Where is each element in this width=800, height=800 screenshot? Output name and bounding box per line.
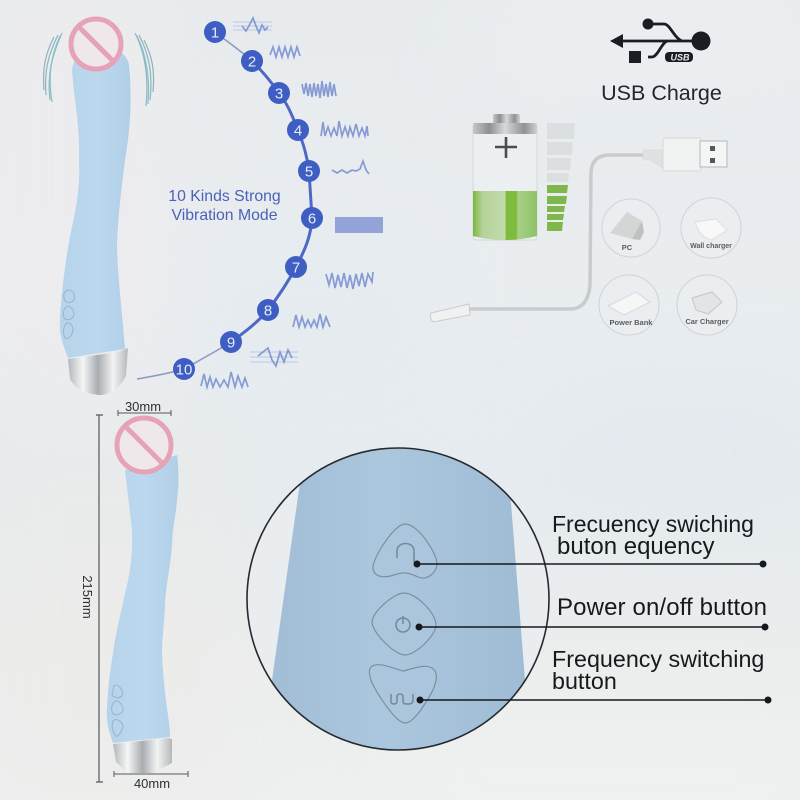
mode numbers: 6	[308, 210, 316, 228]
label: frecuency swiching	[552, 511, 754, 560]
mode nodes	[173, 21, 323, 380]
mode numbers: 9	[227, 334, 235, 352]
mode numbers: 7	[292, 260, 300, 276]
button: frequency up	[373, 524, 437, 578]
vibration marks left	[43, 33, 62, 102]
mode numbers: 10	[176, 362, 192, 378]
vibration mode label: Vibration Mode	[172, 207, 278, 224]
charger option: wall charger	[681, 198, 741, 258]
label: frequency switching: button	[552, 668, 617, 694]
mode numbers: 1	[211, 24, 219, 42]
vibration mode label: 10 Kinds Strong	[168, 188, 281, 205]
charger option: PC	[602, 199, 660, 257]
mode numbers: 4	[294, 122, 302, 140]
mode numbers: 2	[248, 54, 256, 70]
vibration mode label	[168, 188, 281, 224]
charger option: car charger	[677, 275, 737, 335]
waveforms	[201, 18, 383, 387]
battery level bars	[547, 123, 575, 231]
prohibition sign	[71, 19, 121, 69]
leader lines	[414, 560, 772, 704]
label: frequency switching	[552, 646, 764, 694]
mode numbers: 5	[305, 164, 313, 180]
mode numbers	[176, 24, 316, 378]
usb cable	[430, 138, 727, 322]
button: frequency down	[369, 665, 436, 723]
dimension: 40mm: 40mm	[134, 776, 170, 791]
device: top view	[43, 19, 154, 395]
label: power button: Power on/off button	[557, 594, 767, 621]
control button outlines	[63, 290, 74, 339]
panel: button close-up	[247, 440, 549, 760]
vibration mode curve	[137, 21, 323, 380]
usb charge heading: USB Charge	[601, 81, 722, 105]
dimension: 30mm: 30mm	[125, 399, 161, 414]
icon: usb symbol: USB	[670, 52, 690, 62]
icon: battery	[473, 114, 537, 240]
prohibition sign	[117, 418, 171, 472]
silver end cap	[68, 348, 128, 395]
button: power	[372, 593, 436, 655]
dimension: 215mm	[80, 415, 103, 782]
icon: usb symbol	[610, 18, 710, 63]
label: frecuency swiching: buton equency	[557, 533, 714, 560]
dimension: 30mm	[118, 399, 171, 416]
charger option: power bank	[599, 275, 659, 335]
mode numbers: 8	[264, 302, 272, 320]
charger option: PC: PC	[622, 243, 633, 252]
vibration marks right	[135, 33, 154, 106]
dimension: 40mm	[114, 771, 188, 791]
charger option: wall charger: Wall charger	[690, 243, 732, 250]
silver end cap	[113, 738, 172, 773]
label: frecuency swiching: Frecuency swiching	[552, 511, 754, 537]
dimension: 215mm: 215mm	[80, 575, 95, 619]
charger option: car charger: Car Charger	[685, 317, 729, 326]
charger option: power bank: Power Bank	[610, 318, 653, 327]
label: frequency switching: Frequency switching	[552, 646, 764, 672]
control button outlines	[112, 685, 123, 736]
mode numbers: 3	[275, 86, 283, 102]
device: dimension view	[107, 418, 178, 773]
